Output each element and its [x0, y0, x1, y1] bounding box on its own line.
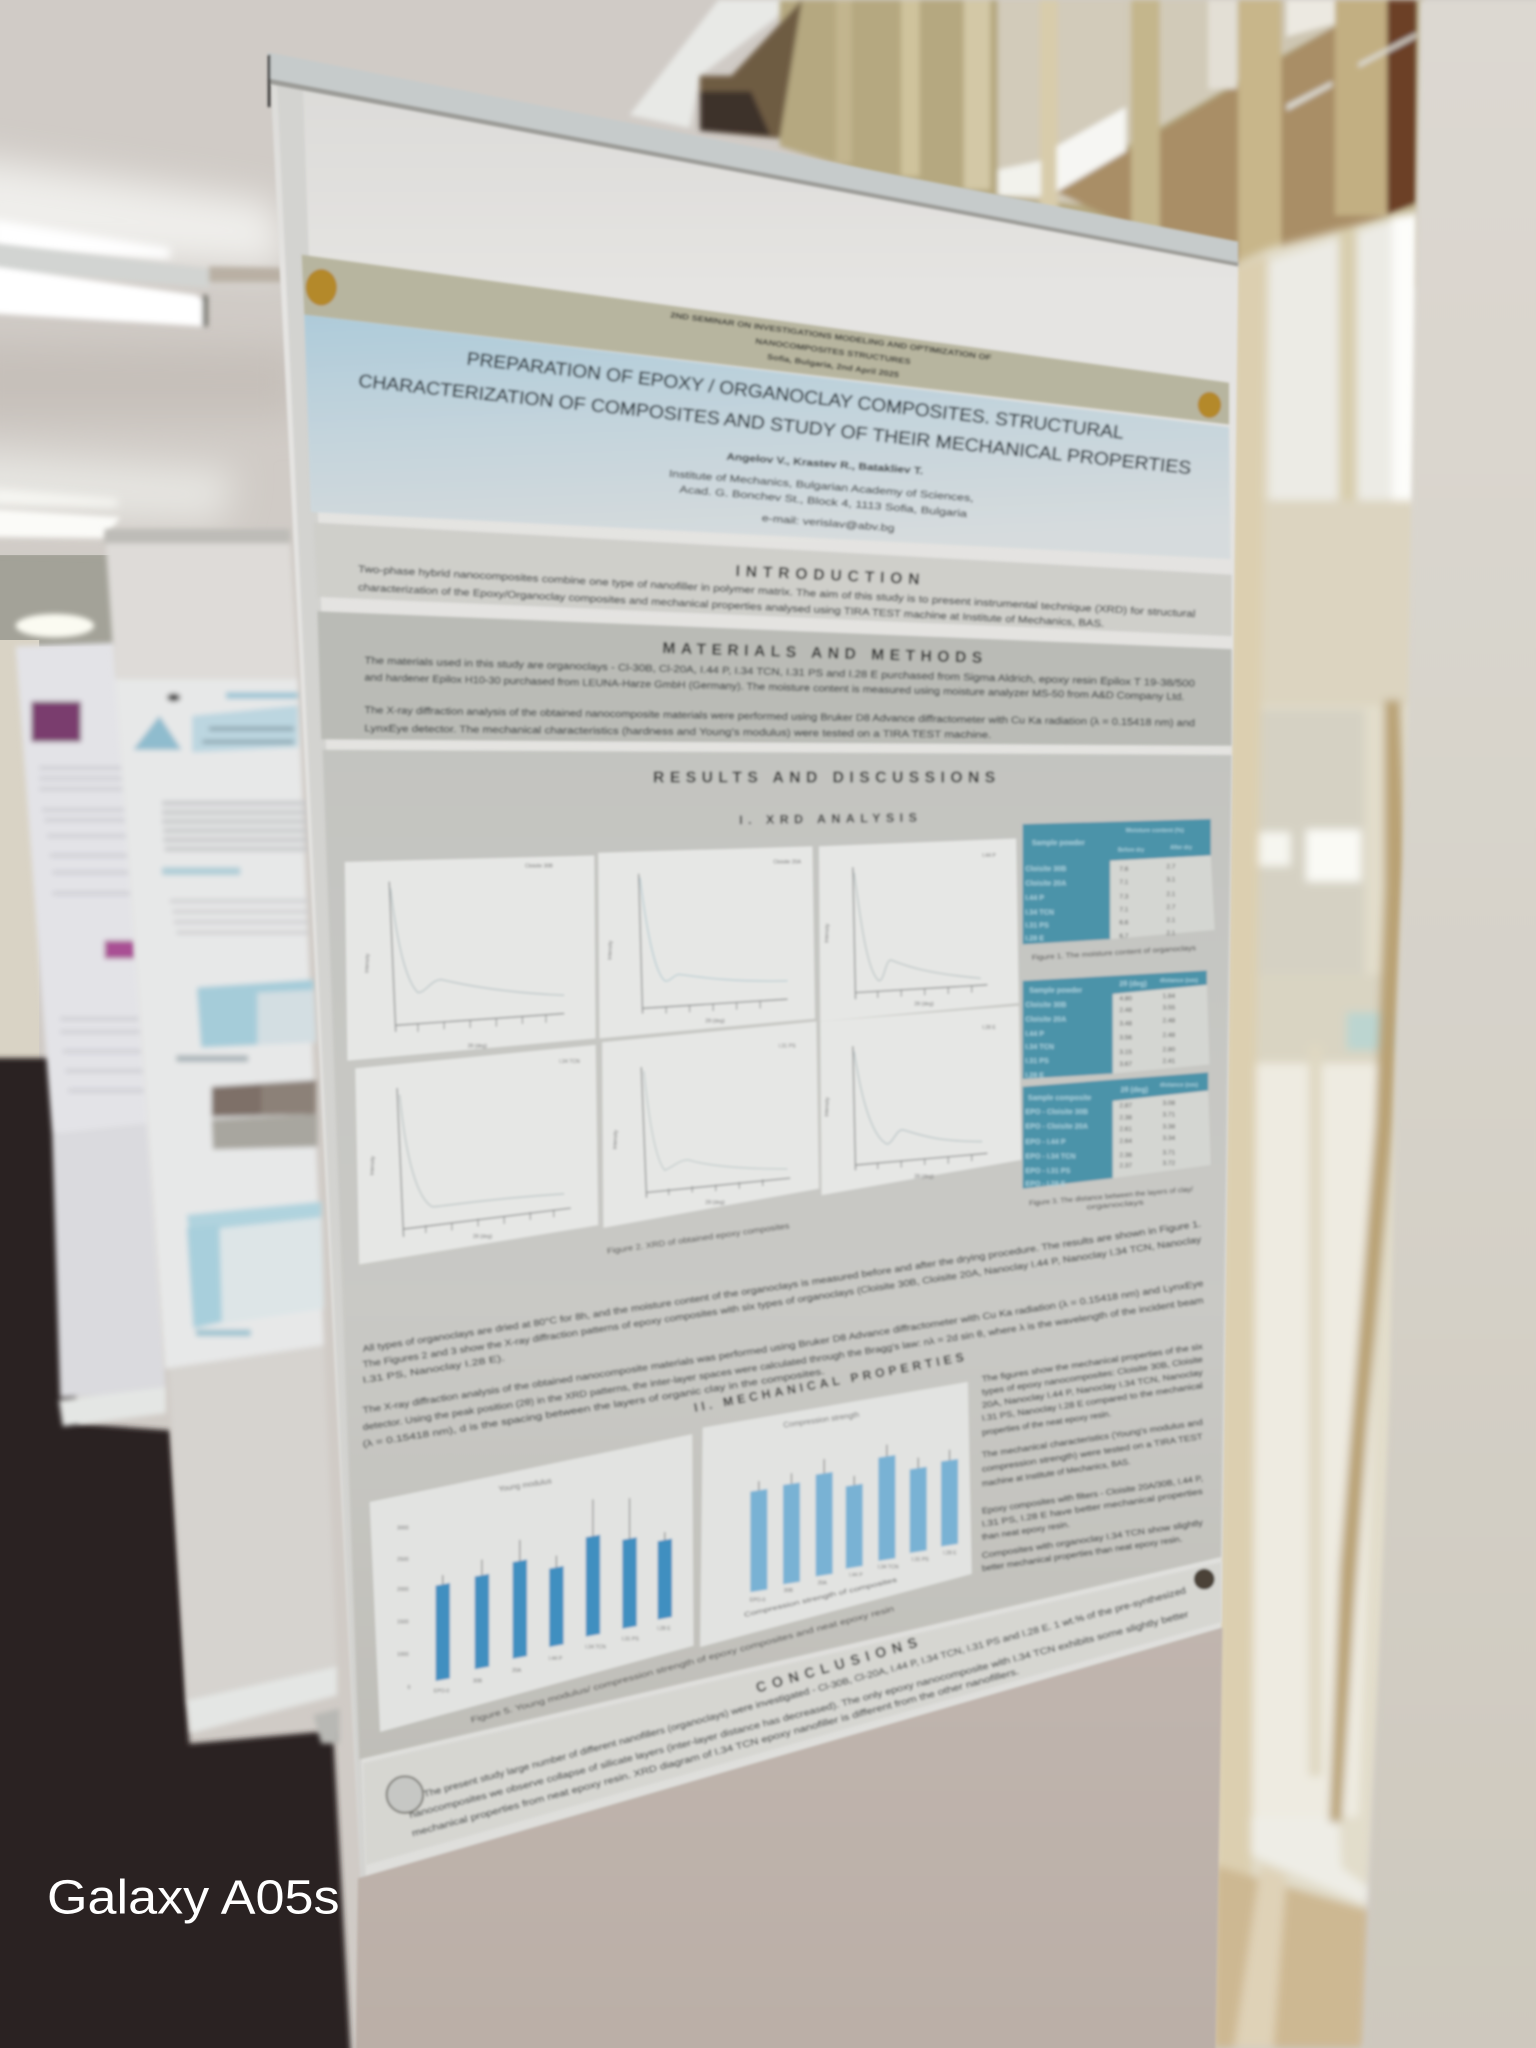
panel: introduction [313, 522, 1232, 636]
chart: compression strength: Compression strength [783, 1410, 860, 1430]
table: moisture content: 6.7 [1119, 933, 1129, 940]
caption: figure 3: organoclays [1086, 1198, 1145, 1211]
poster stand backing [270, 78, 1238, 2048]
table: organoclay spacing: I.34 TCN [1025, 1043, 1054, 1051]
text block: mechanical discussion: Epoxy composites with filters - Cloisite 20A/30B, I.44 P, [981, 1473, 1203, 1516]
chart: XRD I.44 P: I.44 P [982, 853, 996, 859]
chart: XRD I.28 E [820, 1006, 1021, 1195]
table: composite spacing: 2.38 [1119, 1152, 1132, 1159]
table: organoclay spacing: Sample powder [1029, 987, 1082, 995]
table: organoclay spacing: 1.84 [1162, 993, 1176, 1000]
table: moisture content: I.31 PS [1025, 921, 1049, 929]
text block: mechanical discussion: I.31 PS, I.28 E have better mechanical properties [981, 1486, 1203, 1529]
caption: chart sub-caption: Compression strength of composites [743, 1577, 899, 1619]
icon: gold pin left [306, 269, 337, 306]
chart: Young modulus: 2500 [397, 1557, 409, 1563]
heading: results and discussions: RESULTS AND DISCUSSIONS [653, 769, 995, 786]
authors: Angelov V., Krastev R., Batakliev T. [726, 452, 924, 477]
upper curtain [780, 0, 1424, 287]
text block: mechanical discussion: properties of the neat epoxy resin. [981, 1408, 1112, 1437]
table: composite spacing: 2.64 [1119, 1138, 1132, 1145]
chart: XRD I.31 PS: Intensity [612, 1129, 619, 1149]
chart: Young modulus: 2000 [397, 1587, 409, 1593]
text block: mechanical discussion: The figures show the mechanical properties of the six [981, 1341, 1204, 1384]
table: composite spacing: EPO - I.34 TCN [1025, 1153, 1076, 1161]
table: moisture content: 7.6 [1119, 866, 1129, 873]
heading: conclusions: CONCLUSIONS [754, 1635, 920, 1697]
chart: Young modulus: 1500 [397, 1620, 409, 1626]
address: Acad. G. Bonchev St., Block 4, 1113 Sofia, Bulgaria [679, 484, 968, 520]
text block: mechanical discussion: The mechanical characteristics (Young's modulus and [981, 1417, 1204, 1460]
paragraph: drying and XRD: The Figures 2 and 3 show the X-ray diffraction patterns of epoxy composites with six types of organoclays (Cloisite 30B, Cloisite 20A, Nanoclay I.44 P, Nanoclay I.34 TCN, Nanoclay [362, 1234, 1202, 1369]
chart: XRD Cloisite 20A: 2θ (deg) [705, 1019, 725, 1025]
text block: mechanical discussion: types of epoxy nanocomposites: Cloisite 30B, Cloisite [981, 1354, 1204, 1397]
table: organoclay spacing: 2θ (deg) [1119, 980, 1147, 988]
table: composite spacing [1023, 1072, 1211, 1189]
panel: results and discussions [323, 750, 1232, 1759]
chart: XRD I.44 P [819, 839, 1019, 1021]
email: e-mail: verislav@abv.bg [761, 513, 895, 535]
chart: XRD Cloisite 30B: Intensity [364, 953, 371, 973]
panel: conclusions [363, 1562, 1221, 1865]
ceiling glow [0, 157, 300, 522]
conference text line 1: 2ND SEMINAR ON INVESTIGATIONS MODELING AND OPTIMIZATION OF [670, 310, 992, 362]
table: moisture content: I.44 P [1025, 894, 1044, 902]
table: moisture content: I.28 E [1025, 934, 1044, 942]
table: organoclay spacing: 3.48 [1119, 1020, 1132, 1027]
table: organoclay spacing: 2.48 [1162, 1018, 1176, 1025]
table: moisture content: 7.1 [1119, 907, 1129, 914]
chart: compression strength: 30B [784, 1588, 793, 1594]
wall pillar [1364, 0, 1536, 2048]
table: moisture content: I.34 TCN [1025, 908, 1054, 916]
table: organoclay spacing: I.31 PS [1025, 1057, 1049, 1065]
chart: XRD Cloisite 30B: Cloisite 30B [525, 863, 553, 869]
table: moisture content: 2.7 [1166, 864, 1176, 871]
table: moisture content: 2.7 [1166, 904, 1176, 911]
paragraph: XRD analysis: (λ = 0.15418 nm), d is the spacing between the layers of organic clay in the composites. [362, 1366, 825, 1449]
chart: Young modulus: I.28 E [657, 1626, 671, 1632]
table: organoclay spacing: 3.67 [1119, 1061, 1132, 1068]
table: composite spacing: 3.71 [1162, 1112, 1176, 1119]
text block: mechanical discussion: than neat epoxy resin. [981, 1519, 1070, 1542]
chart: XRD I.34 TCN: 2θ (deg) [473, 1234, 493, 1240]
chart: XRD I.28 E: 2θ (deg) [914, 1174, 934, 1180]
heading: introduction: INTRODUCTION [735, 563, 920, 588]
chart: compression strength: I.34 TCN [878, 1565, 899, 1571]
table: moisture content: Before dry [1118, 848, 1144, 854]
table: moisture content: 7.3 [1119, 894, 1129, 901]
table: composite spacing: 3.34 [1162, 1135, 1176, 1142]
table: organoclay spacing: I.28 E [1025, 1072, 1044, 1080]
poster [302, 255, 1232, 1865]
table: composite spacing: 3.08 [1162, 1100, 1176, 1107]
table: moisture content: 3.1 [1166, 877, 1176, 884]
methods line 2: and hardener Epilox H10-30 purchased from LEUNA-Harze GmbH (Germany). The moisture content is measured using moisture analyzer MS-50 from A&D Company Ltd. [364, 672, 1185, 703]
introduction line 2: characterization of the Epoxy/Organoclay composites and mechanical properties analysed using TIRA TEST machine at Institute of Mechanics, BAS. [358, 582, 1104, 630]
chart: XRD I.34 TCN: Intensity [370, 1156, 376, 1176]
chart: XRD I.44 P: Intensity [824, 923, 831, 943]
panel: materials and methods [317, 611, 1232, 746]
curtain and window [700, 0, 1424, 287]
chart: Young modulus [370, 1434, 694, 1732]
caption: figure 2: Figure 2. XRD of obtained epoxy composites [606, 1221, 790, 1256]
chart: compression strength [700, 1382, 972, 1647]
text block: mechanical discussion [981, 1341, 1204, 1573]
heading: materials and methods: MATERIALS AND METHODS [662, 640, 982, 667]
paragraph: XRD analysis: The X-ray diffraction analysis of the obtained nanocomposite materials was performed using Bruker D8 Advance diffractometer with Cu Ka radiation (λ = 0.15418 nm) and LynxEye [362, 1278, 1204, 1415]
chart: Young modulus: 20A [512, 1668, 522, 1674]
chart: XRD Cloisite 30B [345, 856, 596, 1061]
paragraph: drying and XRD: I.31 PS, Nanoclay I.28 E). [362, 1353, 505, 1385]
table: composite spacing: 3.38 [1162, 1123, 1176, 1130]
paragraph: drying and XRD: All types of organoclays are dried at 80°C for 8h, and the moisture content of the organoclays is measured before and after the drying procedure. The results are shown in Figure 1. [362, 1219, 1202, 1354]
camera watermark: Galaxy A05s [47, 1870, 340, 1924]
chart: Young modulus: EPO-0 [434, 1689, 449, 1695]
text block: mechanical discussion: machine at Institute of Mechanics, BAS. [981, 1456, 1131, 1488]
table: organoclay spacing: Cloisite 20A [1025, 1015, 1066, 1023]
chart: Young modulus: I.44 P [549, 1656, 563, 1662]
chart: Young modulus: 0 [408, 1685, 411, 1691]
chart: compression strength: I.31 PS [912, 1557, 929, 1563]
chart: compression strength: I.28 E [943, 1550, 957, 1556]
table: composite spacing: EPO - Cloisite 30B [1025, 1108, 1088, 1116]
table: organoclay spacing: 2.41 [1162, 1058, 1176, 1065]
text block: mechanical discussion: I.31 PS, Nanoclay I.28 E compared to the mechanical [981, 1380, 1204, 1423]
text block: mechanical discussion: Composites with organoclay I.34 TCN show slightly [981, 1517, 1204, 1560]
title line 1: PREPARATION OF EPOXY / ORGANOCLAY COMPOSITES. STRUCTURAL [466, 348, 1125, 443]
table: organoclay spacing: distance (nm) [1160, 978, 1198, 984]
caption: figure 5: Figure 5. Young modulus/ compression strength of epoxy composites and neat epoxy resin [470, 1604, 895, 1725]
table: moisture content [1023, 819, 1215, 944]
table: organoclay spacing: Cloisite 30B [1025, 1001, 1066, 1009]
table: moisture content: 2.1 [1166, 891, 1176, 898]
far background poster [16, 643, 166, 1426]
conference text line 3: Sofia, Bulgaria, 2nd April 2025 [766, 352, 900, 380]
table: organoclay spacing: I.44 P [1025, 1030, 1044, 1038]
chart: XRD Cloisite 20A [598, 846, 815, 1038]
chart: compression strength: 20A [818, 1580, 827, 1586]
conclusions line 3: mechanical properties from neat epoxy resin. XRD diagram of I.34 TCN epoxy nanofiller is different from the other nanofillers. [411, 1666, 1020, 1838]
table: moisture content: 7.1 [1119, 879, 1129, 886]
chart: XRD I.28 E: Intensity [824, 1097, 831, 1117]
icon: dark pin [1194, 1569, 1215, 1590]
methods line 1: The materials used in this study are organoclays - Cl-30B, Cl-20A, I.44 P, I.34 TCN, I.31 PS and I.28 E purchased from Sigma Aldrich, epoxy resin Epilox T 19-38/500 [364, 656, 1196, 690]
table: organoclay spacing: 2.48 [1119, 1007, 1132, 1014]
table: composite spacing: 2θ (deg) [1121, 1086, 1149, 1094]
chart: XRD I.31 PS [602, 1021, 819, 1228]
chart: compression strength: EPO-0 [750, 1597, 765, 1603]
chart: Young modulus: 1000 [397, 1652, 409, 1658]
table: moisture content: Sample powder [1032, 839, 1085, 847]
heading: mechanical properties: II. MECHANICAL PROPERTIES [693, 1350, 965, 1415]
table: composite spacing: EPO - I.28 E [1025, 1180, 1066, 1188]
icon: grey circle pin [387, 1776, 423, 1813]
table: organoclay spacing: 3.15 [1119, 1049, 1132, 1056]
table: composite spacing: distance (nm) [1160, 1083, 1198, 1089]
methods line 3: The X-ray diffraction analysis of the obtained nanocomposite materials were performed using Bruker D8 Advance diffractometer with Cu Ka radiation (λ = 0.15418 nm) and [364, 705, 1195, 729]
table: composite spacing: 2.61 [1119, 1126, 1132, 1133]
paragraph: drying and XRD [362, 1219, 1202, 1385]
table: moisture content: Cloisite 30B [1025, 865, 1066, 873]
table: moisture content: After dry [1170, 845, 1192, 851]
table: organoclay spacing: 4.80 [1119, 995, 1132, 1002]
poster top rail [268, 52, 1238, 266]
paragraph: XRD analysis [362, 1278, 1204, 1449]
sheer curtain over lower window [1208, 209, 1420, 2048]
heading: XRD analysis: I. XRD ANALYSIS [739, 811, 917, 827]
middle background poster [104, 529, 340, 1744]
caption: figure 1: Figure 1. The moisture content of organoclays [1031, 944, 1197, 962]
table: moisture content: Moisture content (%) [1126, 828, 1184, 834]
chart: XRD Cloisite 20A: Intensity [607, 940, 614, 960]
chart: XRD I.28 E: I.28 E [982, 1025, 996, 1031]
chart: XRD Cloisite 20A: Cloisite 20A [773, 859, 802, 865]
table: composite spacing: 3.71 [1162, 1150, 1176, 1157]
table: moisture content: 2.1 [1166, 917, 1176, 924]
text block: mechanical discussion: 20A, Nanoclay I.44 P, Nanoclay I.34 TCN, Nanoclay [981, 1367, 1204, 1410]
table: composite spacing: EPO - I.44 P [1025, 1138, 1066, 1146]
chart: Young modulus: Young modulus [498, 1476, 552, 1494]
table: composite spacing: EPO - Cloisite 20A [1025, 1122, 1088, 1130]
chart: XRD I.34 TCN [355, 1045, 598, 1264]
table: composite spacing: 2.37 [1119, 1163, 1132, 1170]
brown wood beams [1057, 0, 1417, 280]
chart: XRD I.31 PS: 2θ (deg) [705, 1200, 725, 1206]
chart: XRD Cloisite 30B: 2θ (deg) [468, 1044, 487, 1050]
introduction line 1: Two-phase hybrid nanocomposites combine one type of nanofiller in polymer matrix. The aim of this study is to present instrumental technique (XRD) for structural [358, 564, 1196, 620]
table: organoclay spacing: 2.80 [1162, 1046, 1176, 1053]
text block: mechanical discussion: compression strength) were tested on a TIRA TEST [981, 1431, 1203, 1474]
table: composite spacing: 2.87 [1119, 1103, 1132, 1110]
title panel [304, 315, 1230, 559]
conference header band [302, 255, 1229, 424]
chart: XRD I.31 PS: I.31 PS [778, 1044, 796, 1050]
table: moisture content: 6.6 [1119, 920, 1129, 927]
text block: mechanical discussion: better mechanical properties than neat epoxy resin. [981, 1533, 1183, 1573]
table: organoclay spacing: 2.48 [1162, 1032, 1176, 1039]
table: composite spacing: 2.38 [1119, 1114, 1132, 1121]
chart: Young modulus: I.34 TCN [585, 1644, 606, 1650]
ceiling lights [0, 0, 799, 637]
conclusions line 1: The present study large number of different nanofillers (organoclays) were investigated - Cl-30B, Cl-20A, I.44 P, I.34 TCN, I.31 PS and I.28 E. 1 wt.% of the pre-synthesized [422, 1585, 1187, 1799]
table: organoclay spacing: 3.56 [1119, 1035, 1132, 1042]
table: moisture content: Cloisite 20A [1025, 880, 1066, 888]
chart: Young modulus: I.31 PS [622, 1636, 639, 1642]
chart: compression strength: I.44 P [849, 1572, 863, 1578]
table: organoclay spacing: 3.55 [1162, 1005, 1176, 1012]
conference text line 2: NANOCOMPOSITES STRUCTURES [755, 337, 911, 366]
table: composite spacing: Sample composite [1028, 1094, 1091, 1102]
methods line 4: LynxEye detector. The mechanical characteristics (hardness and Young's modulus) were tested on a TIRA TEST machine. [364, 723, 991, 741]
chart: XRD I.44 P: 2θ (deg) [914, 1002, 934, 1008]
title line 2: CHARACTERIZATION OF COMPOSITES AND STUDY OF THEIR MECHANICAL PROPERTIES [357, 370, 1192, 478]
table: moisture content: 2.1 [1166, 930, 1176, 937]
paragraph: XRD analysis: detector. Using the peak position (2θ) in the XRD patterns, the inter-layer spaces were calculated through the Bragg's law: nλ = 2d sin θ, where λ is the wavelength of the incident beam [362, 1295, 1204, 1432]
chart: Young modulus: 30B [473, 1678, 483, 1684]
table: composite spacing: 3.72 [1162, 1160, 1176, 1167]
table: composite spacing: EPO - I.31 PS [1025, 1167, 1071, 1175]
conclusions line 2: nanocomposites we observe collapse of silicate layers (inter-layer distance has decreased). The only epoxy nanocomposite with I.34 TCN exhibits some slightly better [408, 1609, 1190, 1820]
chart: XRD I.34 TCN: I.34 TCN [559, 1059, 580, 1065]
icon: gold pin right [1198, 392, 1221, 418]
table: organoclay spacing [1023, 970, 1209, 1080]
institute: Institute of Mechanics, Bulgarian Academy of Sciences, [668, 469, 974, 505]
caption: figure 3: Figure 3. The distance between the layers of clay/ [1029, 1185, 1193, 1208]
chart: Young modulus: 3000 [397, 1525, 409, 1531]
